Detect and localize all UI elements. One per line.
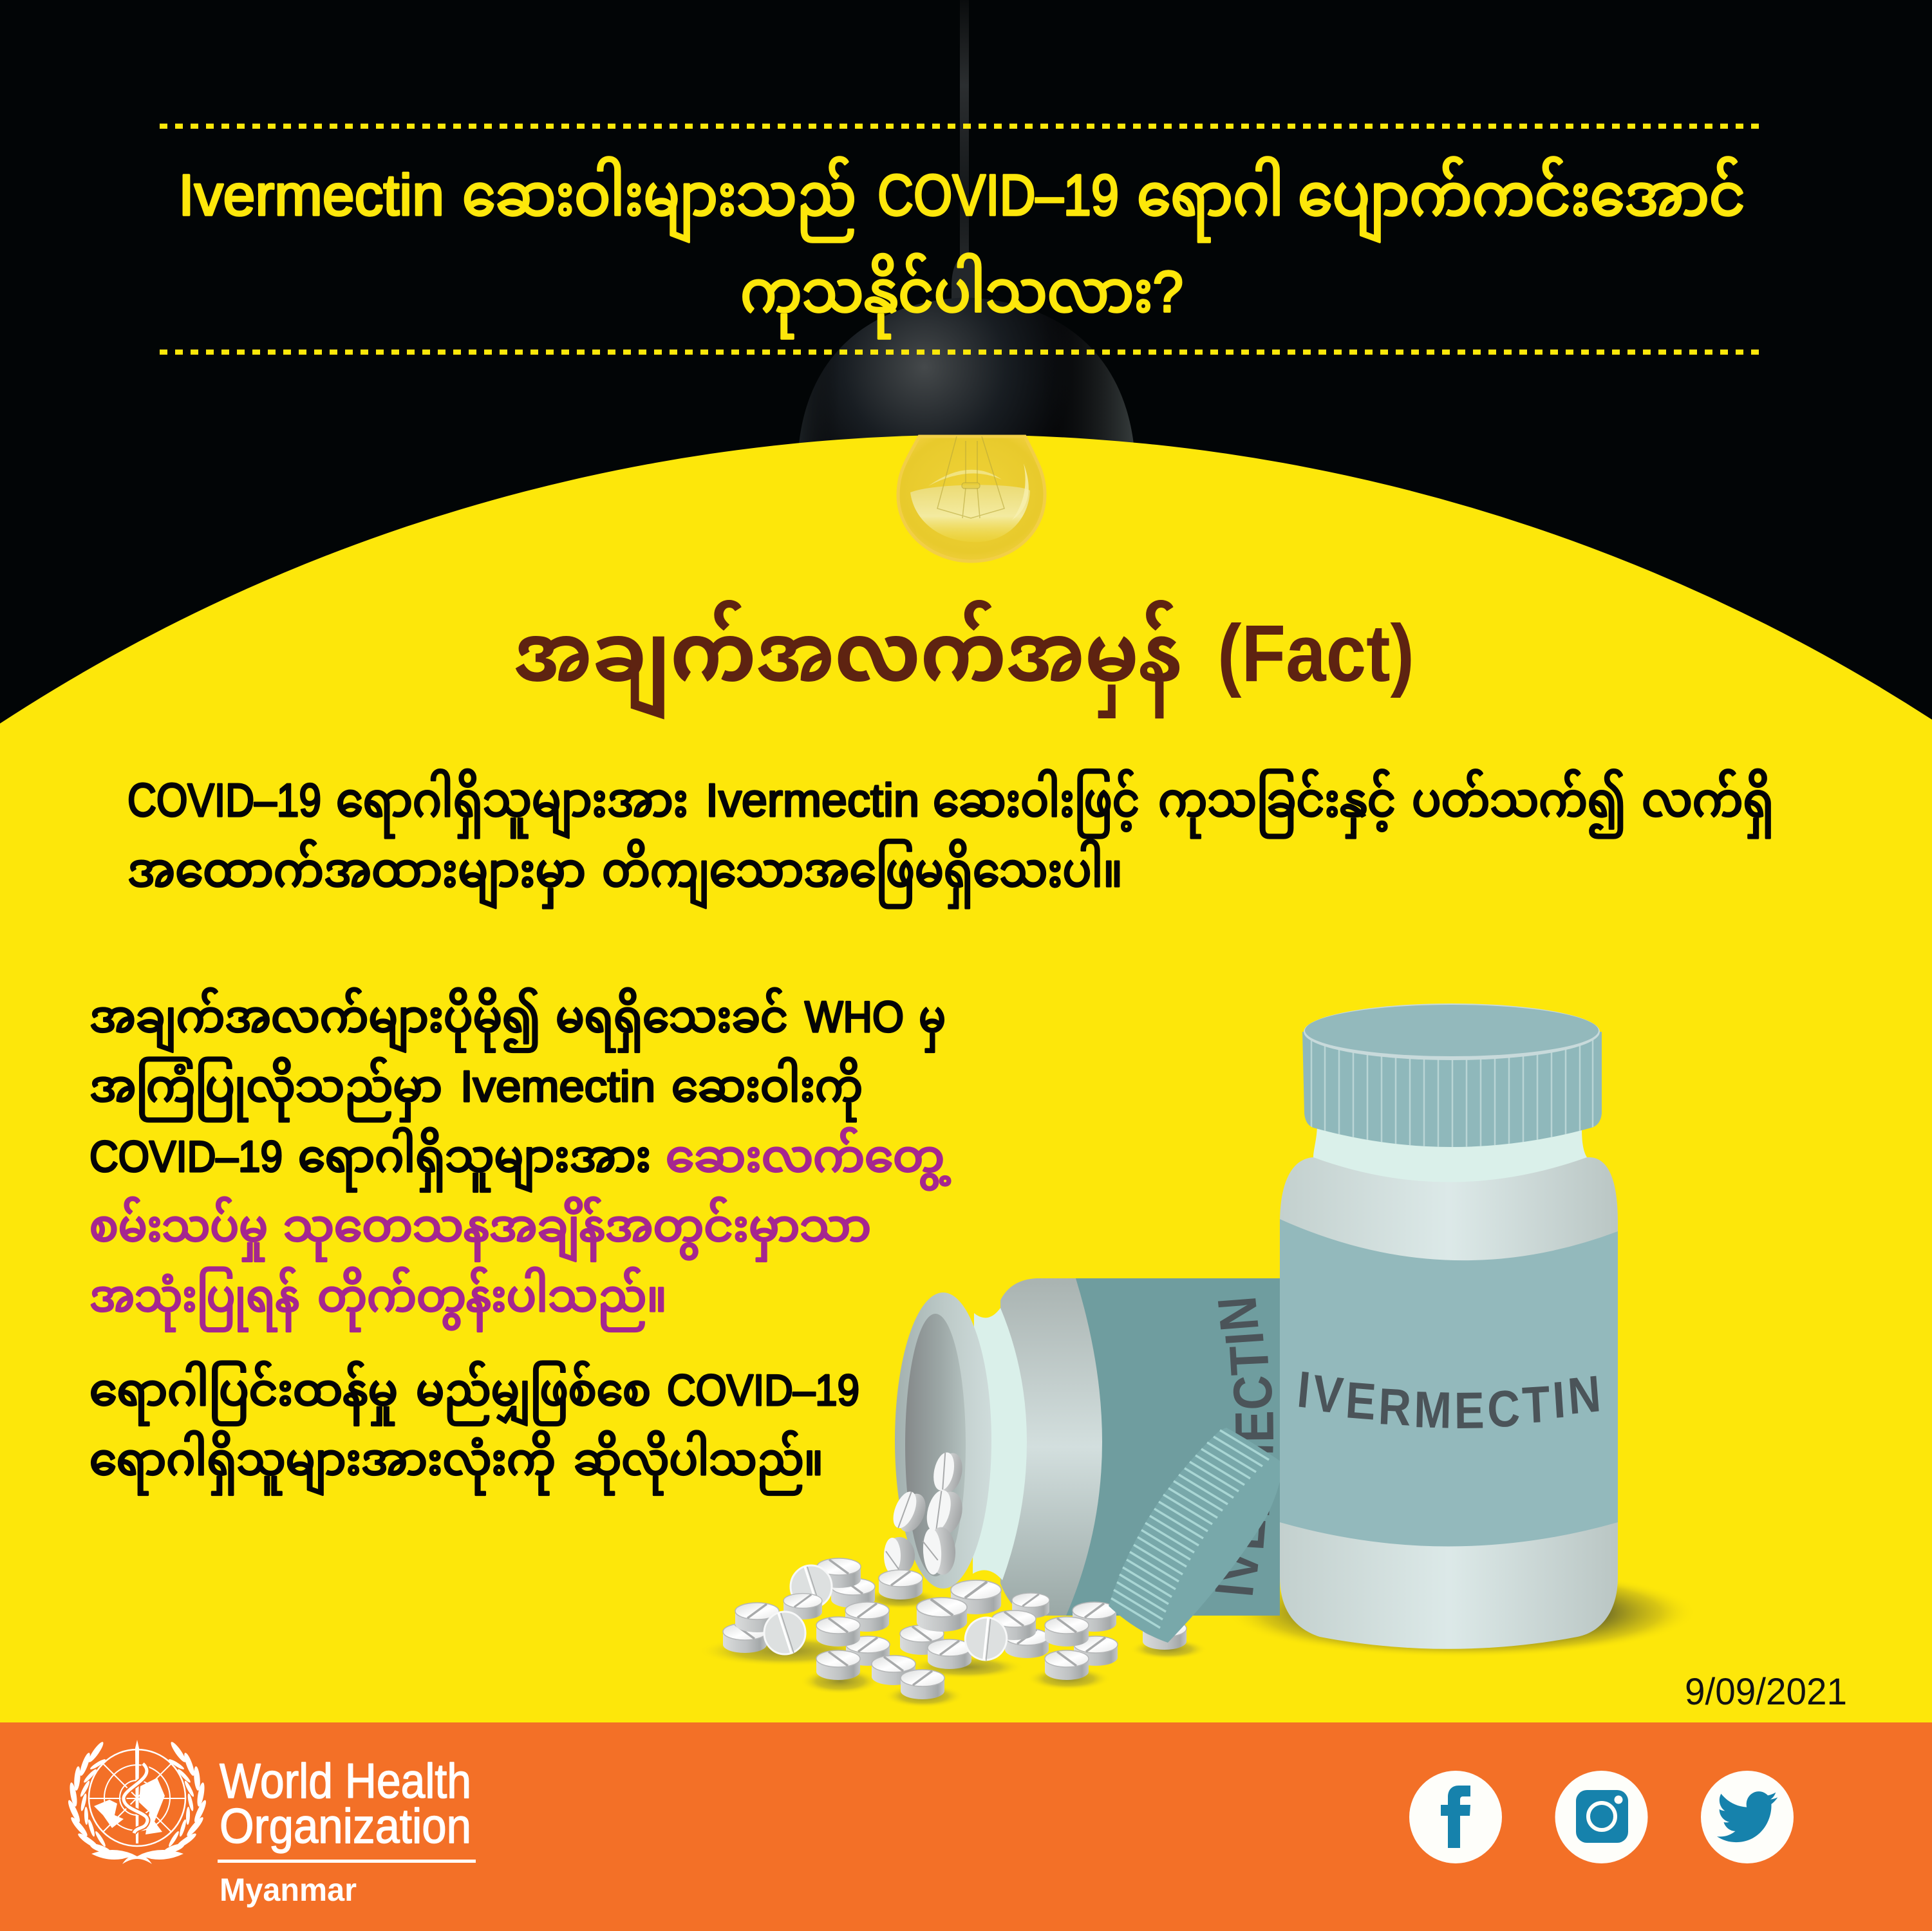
text block: fact statement: ကုသခြင်းနှင့် [1158, 770, 1396, 837]
text block: WHO recommendation [89, 988, 950, 1332]
text block: WHO recommendation: COVID–19 [89, 1132, 283, 1181]
shadows under the pill pile [699, 1589, 1207, 1708]
heading: Fact: (Fact) [1217, 609, 1414, 698]
heading: Fact: အချက်အလက်အမှန် [514, 599, 1182, 720]
text block: fact statement: ရောဂါရှိသူများအား [336, 770, 688, 838]
logo wordmark: World Health [220, 1754, 471, 1809]
text block: fact statement: အထောက်အထားများမှာ [127, 840, 586, 908]
bottle cap: standing [1302, 1003, 1602, 1159]
bottle: standing [1280, 1003, 1618, 1649]
title: Ivermectin [178, 163, 444, 228]
text block: severity note: ရောဂါပြင်းထန်မှု [89, 1361, 398, 1426]
text block: severity note: ဆိုလိုပါသည်။ [574, 1431, 823, 1495]
icon: light bulb [898, 436, 1045, 561]
icon: WHO emblem [66, 1740, 208, 1864]
title: ဆေးဝါးများသည် [462, 156, 856, 242]
text block: WHO recommendation: ရောဂါရှိသူများအား [298, 1128, 651, 1193]
text block: WHO recommendation: သုတေသနအချိန်အတွင်းမှာသာ [283, 1197, 871, 1262]
bottle cap: lying [1109, 1428, 1283, 1643]
title: ကုသနိုင်ပါသလား? [740, 253, 1183, 339]
shadow: standing bottle [1226, 1567, 1696, 1657]
text block: fact statement: ဆေးဝါးဖြင့် [933, 770, 1140, 837]
text block: severity note: ရောဂါရှိသူများအားလုံးကို [89, 1431, 556, 1496]
heading: Fact [514, 599, 1414, 720]
logo wordmark: Myanmar [220, 1872, 357, 1908]
decorative dotted rule bottom [160, 350, 1760, 355]
text block: WHO recommendation: တိုက်တွန်းပါသည်။ [317, 1267, 667, 1332]
decorative dotted rule top [160, 124, 1760, 129]
yellow dome panel [0, 435, 1932, 1722]
logo wordmark: Organization [220, 1799, 471, 1854]
footer bar [0, 1722, 1932, 1931]
pills falling from the bottle [884, 1450, 967, 1576]
text block: fact statement: Ivermectin [706, 775, 919, 826]
text block: WHO recommendation: ဆေးလက်တွေ့ [666, 1128, 950, 1190]
text block: WHO recommendation: အချက်အလက်များပိုမို၍ [89, 988, 541, 1053]
icon: facebook [1409, 1771, 1502, 1863]
illustration: pill bottles [699, 1003, 1696, 1708]
text block: fact statement: COVID–19 [127, 775, 321, 826]
bottle: lying open [895, 1278, 1285, 1616]
text block: fact statement: ပတ်သက်၍ [1412, 770, 1626, 837]
pill pile [723, 1558, 1186, 1699]
text block: WHO recommendation: WHO [805, 993, 904, 1041]
title [178, 156, 1745, 339]
bottle: lying open: IVERMECTIN [1203, 1294, 1285, 1600]
text block: WHO recommendation: ဆေးဝါးကို [671, 1058, 863, 1122]
text block: severity note: COVID–19 [667, 1366, 859, 1415]
text block: fact statement: လက်ရှိ [1642, 770, 1774, 837]
text block: WHO recommendation: စမ်းသပ်မှု [89, 1197, 268, 1262]
logo: World Health Organization [66, 1740, 476, 1908]
icon: twitter [1701, 1771, 1794, 1863]
text block: severity note [89, 1361, 859, 1496]
title: COVID–19 [877, 163, 1119, 228]
lamp: cord and shade [799, 0, 1134, 444]
text block: severity note: မည်မျှဖြစ်စေ [416, 1361, 651, 1426]
title: ပျောက်ကင်းအောင် [1298, 156, 1745, 242]
text block: WHO recommendation: မှ [919, 993, 946, 1052]
text block: WHO recommendation: အကြံပြုလိုသည်မှာ [89, 1058, 442, 1122]
bottle label text: IVERMECTIN [1295, 1360, 1603, 1439]
text block: WHO recommendation: အသုံးပြုရန် [89, 1267, 299, 1332]
text block: WHO recommendation: မရရှိသေးခင် [556, 988, 788, 1052]
text block: WHO recommendation: Ivemectin [460, 1062, 655, 1111]
date: 9/09/2021 [1685, 1671, 1847, 1713]
logo wordmark [218, 1754, 476, 1908]
title: ရောဂါ [1137, 157, 1284, 242]
text block: fact statement [127, 770, 1774, 908]
icon: instagram [1555, 1771, 1648, 1863]
text block: fact statement: တိကျသောအဖြေမရှိသေးပါ။ [602, 840, 1123, 908]
